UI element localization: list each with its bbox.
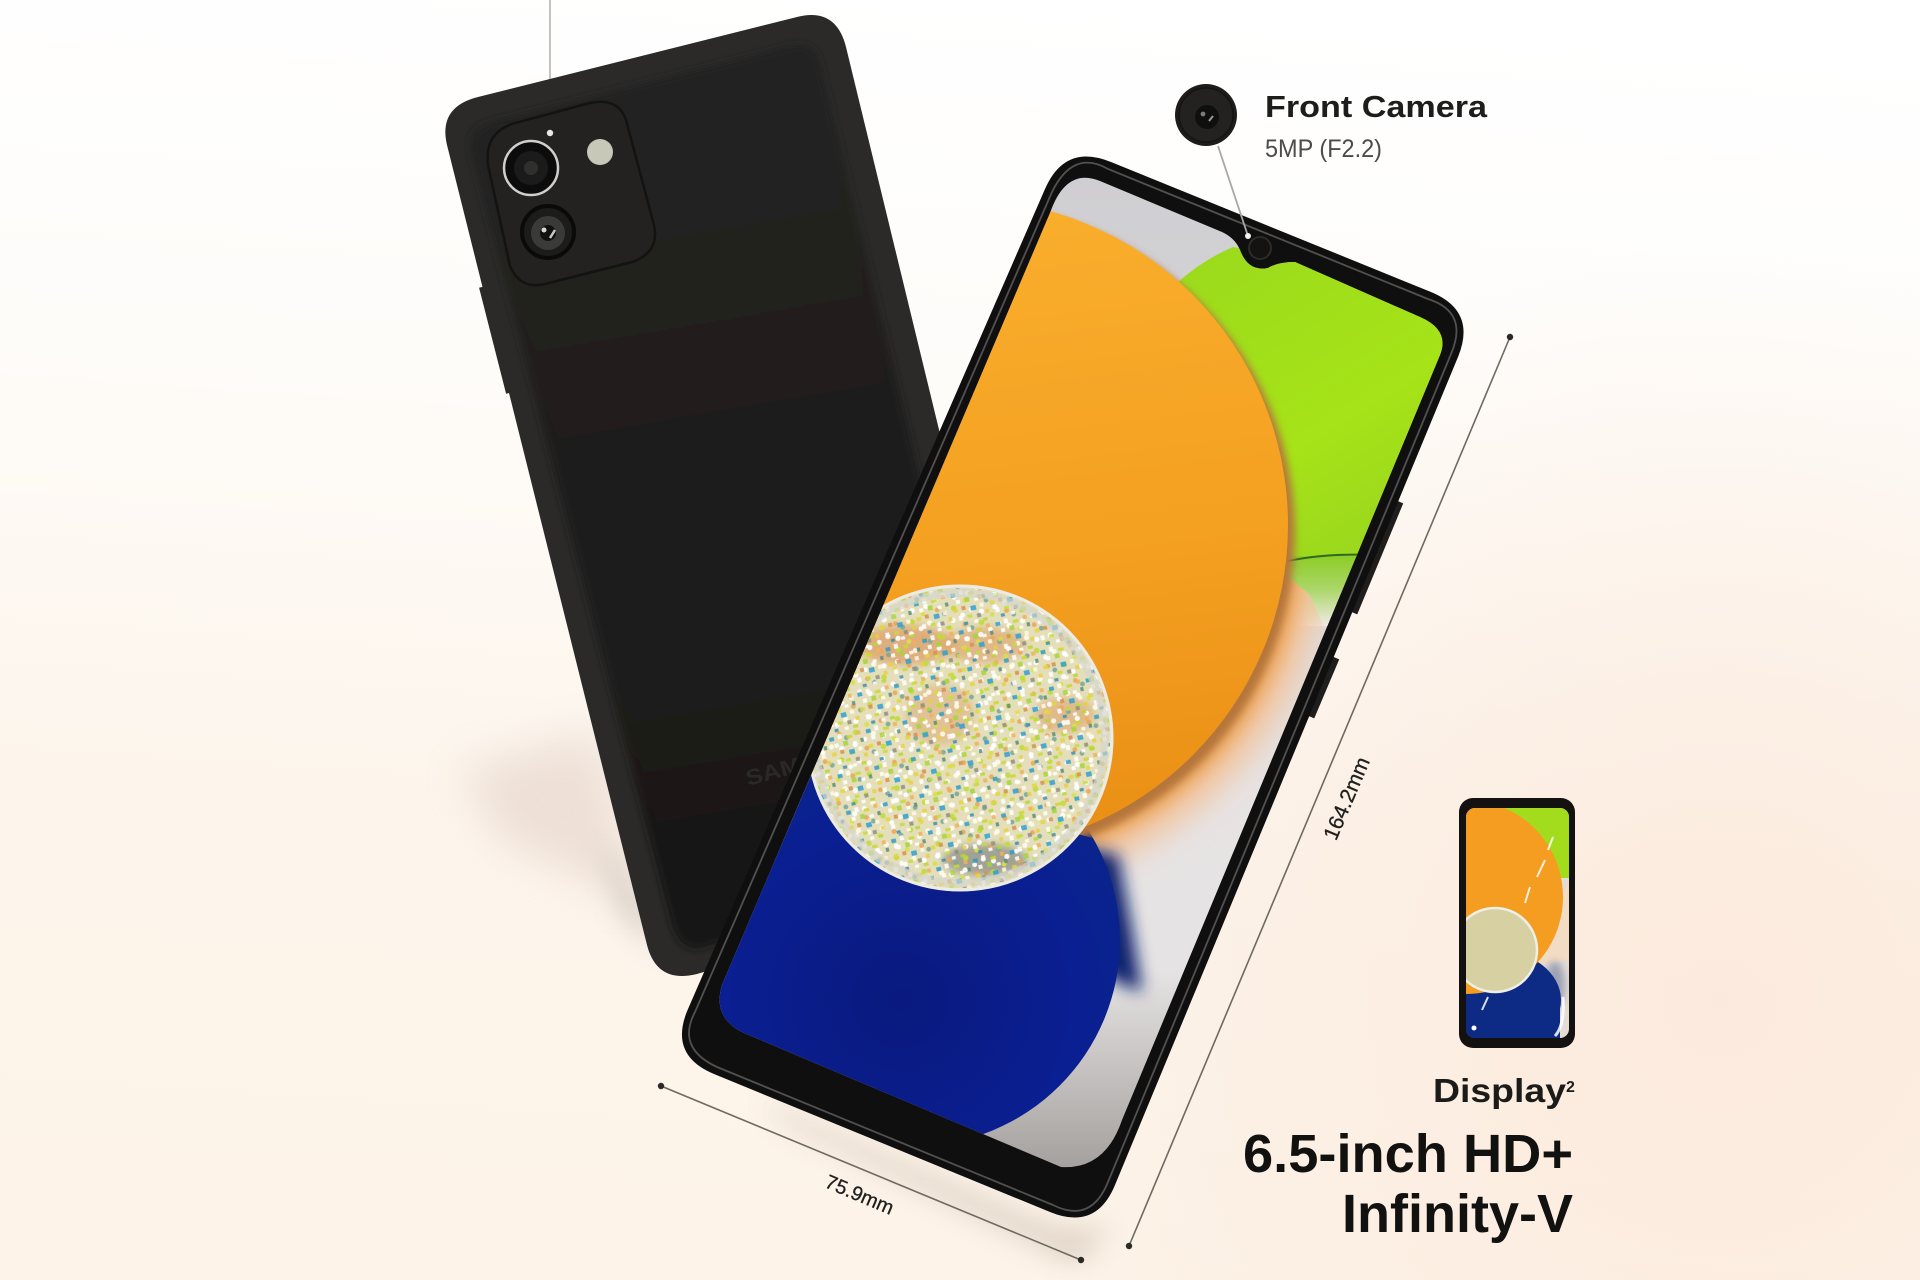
- mini phone icon: [1459, 798, 1575, 1048]
- orange shadow: [814, 210, 1300, 838]
- width dimension: [658, 1083, 1084, 1263]
- side buttons: [1311, 502, 1400, 717]
- screen: [720, 178, 1442, 1168]
- main lens: [504, 141, 558, 195]
- back phone body: [445, 15, 1046, 976]
- back phone: [445, 15, 1046, 976]
- footnote marker: 2: [1566, 1079, 1575, 1096]
- callout line: rear camera: [549, 0, 551, 133]
- callout dot: [1245, 233, 1251, 239]
- height dimension: [1126, 334, 1513, 1249]
- side button: [482, 287, 509, 393]
- front phone: [682, 156, 1464, 1218]
- shadow beneath front phone: [760, 1100, 1110, 1262]
- blue soft shape: [1070, 845, 1142, 992]
- punch-hole camera: [1249, 237, 1271, 259]
- label: 164.2mm: 164.2mm: [1319, 754, 1375, 843]
- mini phone body: [1459, 798, 1575, 1048]
- front phone body: [682, 156, 1464, 1218]
- brand mark: SAMSUNG: [743, 733, 875, 791]
- callout dot: rear camera: [547, 130, 553, 136]
- label: 75.9mm: 75.9mm: [822, 1171, 897, 1220]
- screen base: [720, 178, 1442, 1168]
- camera island: [488, 102, 655, 285]
- orange shape: [813, 211, 1288, 827]
- back phone inner surface: [471, 45, 1010, 949]
- callout line: [1218, 146, 1248, 236]
- front camera callout: [1175, 84, 1488, 239]
- display text: [1243, 1072, 1575, 1244]
- green divider line: [1288, 555, 1375, 561]
- heading: Display: Display: [1433, 1072, 1567, 1109]
- label: 5MP: 5MP (F2.2): [1265, 135, 1382, 163]
- label: Front Camera: Front Camera: [1265, 89, 1488, 124]
- peach glow behind orange: [778, 500, 1326, 870]
- headline line two: Infinity-V: [1342, 1184, 1573, 1244]
- bezel highlight: [689, 163, 1456, 1211]
- second lens: [522, 206, 574, 258]
- green shape: [1178, 247, 1442, 558]
- green fade: [1286, 556, 1356, 626]
- icon: front camera lens: [1175, 84, 1237, 146]
- blue shape: [720, 758, 1120, 1134]
- flash: [587, 139, 613, 165]
- mini screen: [1466, 808, 1569, 1038]
- headline line one: 6.5-inch HD+: [1243, 1124, 1573, 1184]
- shadow beside back phone: [460, 730, 665, 955]
- glitter disc: [807, 585, 1113, 891]
